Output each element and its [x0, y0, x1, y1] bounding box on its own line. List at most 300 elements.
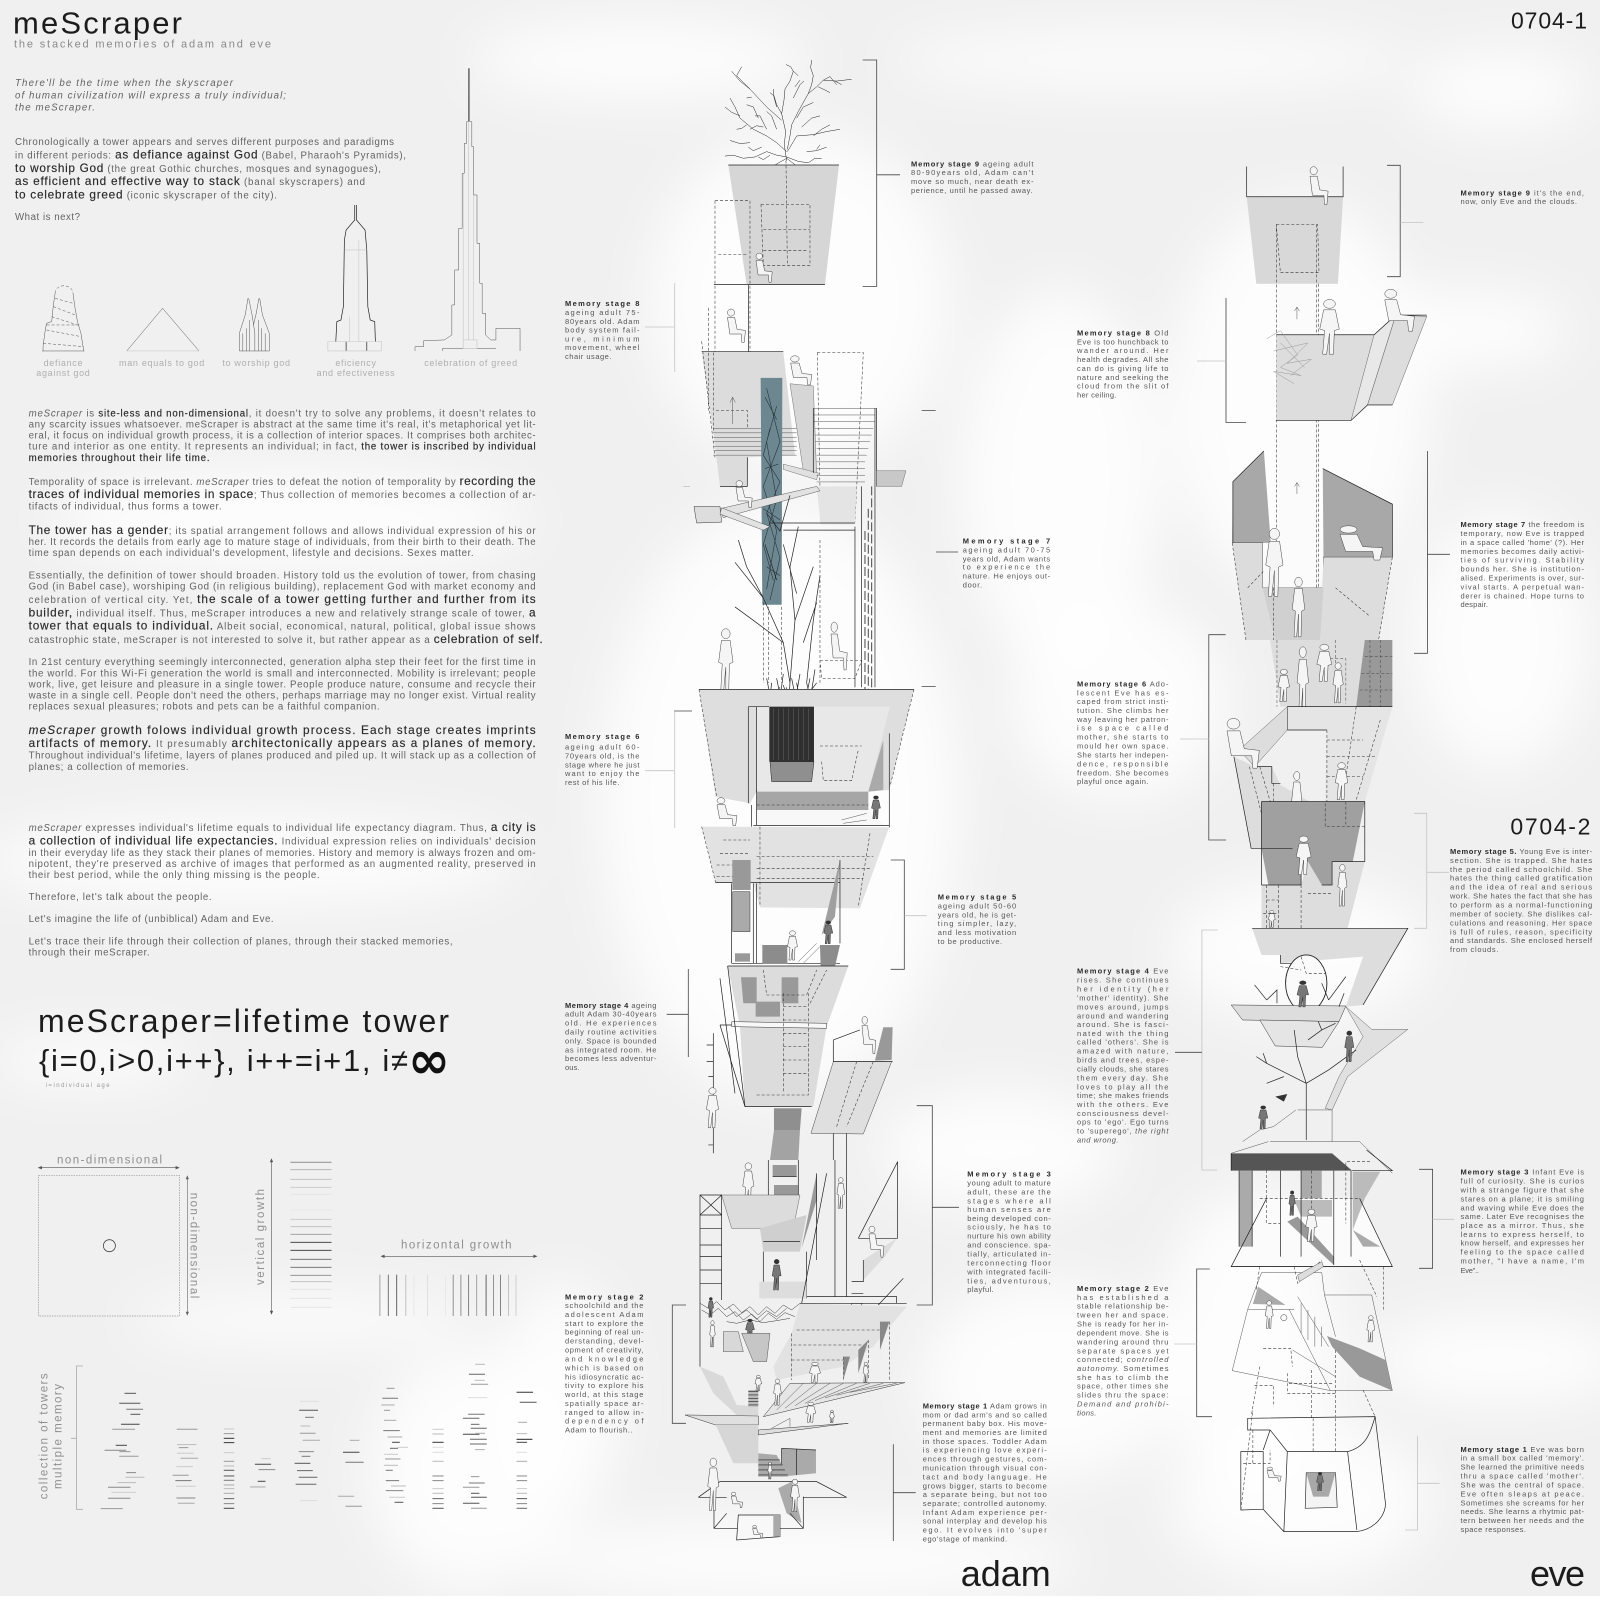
- text: adam memory stage 3: human senses are: [967, 1205, 1051, 1214]
- text: eve memory stage 6: caped from strict insti-: [1077, 697, 1169, 706]
- stage 3 floor: [773, 1303, 907, 1380]
- text block: chronology of towers: in different periods: as defiance against God (Babel, Pharaoh's Pyramids),: [15, 148, 406, 162]
- text block: manifesto: planes; a collection of memories.: [29, 762, 189, 773]
- text block: manifesto: eral, it focus on individual growth process, it is a collection of interior spaces. It comprises both architec-: [29, 430, 536, 442]
- text: eve memory stage 6: [1076, 679, 1169, 786]
- left lower plane: [700, 1367, 758, 1415]
- text: adam memory stage 3: terconnecting floor: [967, 1258, 1051, 1267]
- text: eve memory stage 1: space responses.: [1460, 1525, 1526, 1534]
- text: eve memory stage 6: mother, she starts to: [1077, 733, 1169, 742]
- text: eve memory stage 5: member of society. She dislikes cal-: [1450, 909, 1593, 918]
- text: adam memory stage 1: a separate being, but not too: [923, 1490, 1047, 1499]
- hatched slab: [763, 1383, 905, 1417]
- text block: manifesto: Therefore, let's talk about the people.: [29, 892, 212, 903]
- stage 7 walls: [1232, 451, 1271, 543]
- stage 5 plane: [702, 827, 889, 908]
- text: eve memory stage 5: the period called schoolchild. She: [1450, 865, 1593, 874]
- text: adam memory stage 5: ageing adult 50-60: [938, 901, 1017, 910]
- text: eve memory stage 3: feeling to the space called: [1460, 1248, 1584, 1257]
- text: eve memory stage 3: [1460, 1168, 1584, 1275]
- text: eve memory stage 8: Memory stage 8 Old: [1077, 329, 1169, 338]
- text: eve memory stage 3: Eve"..: [1460, 1266, 1480, 1275]
- subtitle: the stacked memories of adam and eve: [14, 39, 271, 51]
- text: adam memory stage 3: playful.: [967, 1285, 994, 1294]
- text block: manifesto: replaces sexual pleasures; robots and pets can be a faithful companion.: [29, 702, 380, 712]
- bars: memory columns: [101, 1364, 537, 1509]
- text: adam memory stage 5: and less motivation: [938, 928, 1017, 937]
- text: adam memory stage 2: opment of creativity,: [565, 1346, 644, 1355]
- text block: chronology of towers: [15, 137, 406, 223]
- text: adam memory stage 6: 70years old, is the: [565, 751, 640, 760]
- diagram: collection of towers: multiple memory: [52, 1384, 64, 1489]
- text: adam memory stage 5: [938, 892, 1017, 946]
- diagram: collection of towers: [38, 1364, 537, 1509]
- text: eve memory stage 8: wander around. Her: [1076, 346, 1169, 355]
- text: eve memory stage 4: cially clouds, she stares: [1077, 1064, 1169, 1073]
- text block: manifesto: In 21st century everything seemingly interconnected, generation alpha step their feet for the first time in: [29, 657, 536, 668]
- text block: manifesto: memories throughout their life time.: [29, 453, 210, 464]
- formula: lifetime tower: [38, 1003, 450, 1091]
- text: eve memory stage 4: around and wandering: [1077, 1011, 1169, 1020]
- text: adam memory stage 3: Memory stage 3: [967, 1170, 1051, 1179]
- text: eve memory stage 1: She was the central of space.: [1460, 1480, 1584, 1489]
- text: adam memory stage 2: beginning of real un-: [565, 1328, 644, 1337]
- text: adam memory stage 9: perience, until he passed away.: [911, 186, 1033, 195]
- text: adam memory stage 4: ous.: [565, 1063, 580, 1072]
- text: adam memory stage 4: only. Space is bounded: [565, 1036, 657, 1045]
- lower tree: [735, 495, 820, 683]
- text: eve memory stage 8: nature and seeking the: [1077, 373, 1169, 382]
- text block: manifesto: Let's imagine the life of (unbiblical) Adam and Eve.: [29, 914, 274, 925]
- captions: tower types: against god: [36, 368, 91, 378]
- text: eve memory stage 7: Memory stage 7 the freedom is: [1460, 520, 1584, 529]
- text block: manifesto: celebration of vertical city. Yet, the scale of a tower getting further and further from its: [29, 592, 536, 606]
- text block: chronology of towers: to worship God (the great Gothic churches, mosques and synagogues),: [15, 161, 381, 175]
- icon: cathedral: [239, 298, 269, 351]
- text: adam memory stage 4: adult Adam 30-40years: [565, 1010, 657, 1019]
- diagram: horizontal growth: horizontal growth: [401, 1239, 512, 1251]
- text: adam memory stage 8: [565, 299, 640, 361]
- text: eve memory stage 5: is full of rules, reason, specificity: [1450, 927, 1593, 936]
- text: adam memory stage 1: Memory stage 1 Adam grows in: [923, 1401, 1047, 1410]
- text: eve memory stage 1: in a small box called 'memory'.: [1460, 1454, 1584, 1463]
- text: eve memory stage 6: lescent Eve has es-: [1077, 688, 1169, 697]
- text: eve memory stage 1: Memory stage 1 Eve was born: [1460, 1445, 1584, 1454]
- stages 6 and 5 middle tower: [699, 689, 914, 967]
- text: eve memory stage 7: despair.: [1460, 600, 1488, 609]
- text: eve memory stage 2: tween her and space.: [1077, 1311, 1169, 1320]
- text: eve memory stage 3: Memory stage 3 Infant Eve is: [1460, 1168, 1584, 1177]
- text block: manifesto: meScraper expresses individual's lifetime equals to individual life expectancy diagram. Thus, a city is: [29, 820, 536, 834]
- diagram: vertical growth: vertical growth: [255, 1189, 267, 1285]
- text: adam memory stage 6: [564, 732, 640, 787]
- text: adam memory stage 9: [911, 159, 1034, 195]
- captions: tower types: celebration of greed: [424, 358, 518, 368]
- diagram: collection of towers: collection of towers: [38, 1373, 50, 1499]
- text block: manifesto: her. It records the details from early age to mature stage of individuals, from their birth to their death. The: [29, 537, 536, 548]
- formula note: i=individual age: [46, 1083, 110, 1089]
- text: eve memory stage 4: 'mother' identity). She: [1077, 993, 1169, 1002]
- text: eve memory stage 8: her ceiling.: [1077, 391, 1117, 400]
- text block: intro quote: [15, 78, 286, 114]
- text: eve memory stage 5: Memory stage 5. Young Eve is inter-: [1450, 847, 1593, 856]
- text: eve memory stage 7: in a space called 'home' (?). Her: [1460, 538, 1584, 547]
- text: adam memory stage 6: rest of his life.: [565, 778, 620, 787]
- text: adam memory stage 3: tially, articulated in-: [967, 1250, 1051, 1259]
- brackets: adam stages: [645, 60, 959, 1541]
- text block: manifesto: in their everyday life as they stack their planes of memories. History and memory is always frozen and om-: [29, 848, 536, 859]
- text: adam memory stage 7: to experience the: [963, 563, 1051, 572]
- captions: tower types: eficiency: [335, 358, 377, 368]
- balcony with figure: [875, 1027, 893, 1061]
- text: eve memory stage 3: place as a mirror. Thus, she: [1460, 1221, 1584, 1230]
- icon: empire state building: [328, 205, 382, 351]
- text: eve memory stage 4: time; she makes friends: [1077, 1091, 1169, 1100]
- text: eve memory stage 8: health degrades. All she: [1077, 355, 1169, 364]
- text: adam memory stage 7: ageing adult 70-75: [963, 545, 1051, 554]
- text: adam memory stage 2: start to explore the: [565, 1319, 644, 1328]
- text block: manifesto: tifacts of individual, thus forms a tower.: [29, 502, 222, 512]
- diagram: non-dimensional square: non-dimensional: [188, 1193, 200, 1298]
- text: eve memory stage 2: has established a: [1077, 1293, 1169, 1302]
- stages 3 to 1 lower tower: [685, 1160, 907, 1540]
- text: eve memory stage 6: dence, responsible: [1077, 759, 1169, 768]
- text block: manifesto: catastrophic state, meScraper is not interested to solve it, but rather appear as a celebration of self.: [29, 632, 543, 646]
- text block: manifesto: their best period, while the only thing missing is the people.: [29, 870, 320, 881]
- text: adam memory stage 2: adolescent Adam: [565, 1310, 644, 1319]
- text: eve memory stage 2: wandering around thru: [1076, 1337, 1169, 1346]
- grass: [767, 669, 817, 712]
- text: adam memory stage 6: stage where he just: [565, 760, 640, 769]
- text: adam memory stage 1: is experiencing love experi-: [923, 1446, 1047, 1455]
- text: adam memory stage 3: sciously, he has to: [967, 1223, 1051, 1232]
- text: eve memory stage 5: culations and reasoning. Her space: [1450, 918, 1593, 927]
- text: eve memory stage 4: amazed with nature,: [1077, 1047, 1169, 1056]
- text: adam memory stage 8: movement, wheel: [565, 343, 640, 352]
- text: eve memory stage 8: can do is giving life to: [1077, 364, 1169, 373]
- text block: manifesto: traces of individual memories in space; Thus collection of memories becomes a collection of ar-: [29, 487, 536, 501]
- diagram: horizontal growth: [380, 1239, 537, 1316]
- stage 8 planes: [1276, 335, 1374, 420]
- text: adam memory stage 3: stages where all: [967, 1196, 1051, 1205]
- text: adam memory stage 1: Infant Adam experience per-: [923, 1508, 1047, 1517]
- text: eve memory stage 2: separate spaces yet: [1077, 1346, 1169, 1355]
- text: adam memory stage 2: Adam to flourish..: [565, 1426, 633, 1435]
- text: adam memory stage 7: [963, 537, 1051, 590]
- text: eve memory stage 4: to 'superego', the right: [1077, 1127, 1169, 1136]
- text: eve memory stage 7: derer is chained. Hope turns to: [1460, 592, 1584, 601]
- text: eve memory stage 4: her identity (her: [1077, 984, 1169, 993]
- text: eve memory stage 5: work. She hates the fact that she has: [1449, 892, 1593, 901]
- text: adam memory stage 1: ences through gestures, com-: [923, 1455, 1047, 1464]
- text: eve memory stage 5: hates the thing called gratification: [1450, 874, 1593, 883]
- text block: intro quote: the meScraper.: [15, 102, 95, 114]
- tall dark verticals: [855, 408, 875, 687]
- text: adam memory stage 8: ageing adult 75-: [565, 308, 640, 317]
- text: adam memory stage 3: [966, 1170, 1051, 1294]
- text: adam memory stage 6: ageing adult 60-: [565, 742, 640, 751]
- text: adam memory stage 2: tivity to explore his: [565, 1381, 644, 1390]
- text: eve memory stage 5: [1449, 847, 1593, 954]
- text: eve memory stage 7: ties of surviving. Stability: [1460, 556, 1584, 565]
- text: eve memory stage 5: section. She is trapped. She hates: [1450, 856, 1593, 865]
- text block: manifesto: Essentially, the definition of tower should broaden. History told us the evolution of tower, from chasing: [29, 570, 536, 582]
- tree on pot: [725, 60, 852, 176]
- text: eve memory stage 4: with the others. Eve: [1076, 1100, 1169, 1109]
- text: eve memory stage 6: way leaving her patron-: [1076, 715, 1169, 724]
- text: eve memory stage 4: around. She is fasci-: [1077, 1020, 1169, 1029]
- text: adam memory stage 2: and knowledge: [565, 1354, 644, 1363]
- text: eve memory stage 2: stable relationship be-: [1077, 1302, 1169, 1311]
- text: eve memory stage 4: and wrong.: [1077, 1136, 1119, 1145]
- text: adam memory stage 2: spatially space ar-: [565, 1399, 644, 1408]
- text: adam memory stage 3: young adult to mature: [967, 1178, 1051, 1187]
- text block: manifesto: The tower has a gender; its spatial arrangement follows and allows individual expression of his or: [29, 523, 536, 537]
- text: eve memory stage 4: consciousness devel-: [1077, 1109, 1169, 1118]
- text: adam memory stage 3: nurture his own ability: [967, 1232, 1051, 1241]
- text block: chronology of towers: Chronologically a tower appears and serves different purposes and paradigms: [15, 137, 394, 148]
- text: adam memory stage 2: Memory stage 2: [565, 1292, 644, 1301]
- brackets: eve stages: [1174, 165, 1454, 1530]
- text: eve memory stage 2: dependent move. She is: [1077, 1328, 1169, 1337]
- text block: manifesto: time span depends on each individual's development, lifestyle and decisions. Sexes matter.: [29, 548, 474, 559]
- text: eve memory stage 2: slides thru the space:: [1077, 1391, 1169, 1400]
- text: eve memory stage 2: autonomy. Sometimes: [1077, 1364, 1169, 1373]
- text: eve memory stage 2: tions.: [1077, 1408, 1097, 1417]
- text: adam memory stage 8: 80years old. Adam: [565, 317, 640, 326]
- text: eve memory stage 3: learns to express herself, to: [1460, 1230, 1584, 1239]
- text: eve memory stage 4: nated with the thing: [1077, 1029, 1169, 1038]
- text: adam memory stage 2: schoolchild and the: [565, 1301, 644, 1310]
- text: adam memory stage 7: Memory stage 7: [963, 537, 1051, 546]
- text: eve memory stage 6: She starts her indepen-: [1077, 750, 1169, 759]
- stages 3 to 1 lower tower: [1231, 1150, 1392, 1532]
- text: adam memory stage 7: nature. He enjoys out-: [963, 572, 1051, 581]
- stages 9 to 7 upper tower: [1232, 167, 1427, 640]
- label: 0704-1: 0704-1: [1511, 8, 1587, 34]
- text: adam memory stage 3: ties, adventurous,: [967, 1276, 1051, 1285]
- text block: manifesto: meScraper growth folows individual growth process. Each stage creates imprints: [29, 723, 536, 737]
- captions: tower types: defiance: [44, 358, 83, 368]
- stage 3 rooms: [773, 1165, 797, 1177]
- text: adam memory stage 4: old. He experiences: [565, 1019, 657, 1028]
- formula: lifetime tower: meScraper=lifetime tower: [38, 1003, 449, 1039]
- text: eve memory stage 3: full of curiosity. She is curios: [1460, 1177, 1584, 1186]
- text block: manifesto: builder, individual itself. Thus, meScraper introduces a new and relatively strange scale of tower, a: [29, 606, 536, 620]
- text: adam memory stage 1: munication through visual con-: [923, 1464, 1047, 1473]
- panel: adam tower: [683, 60, 914, 1540]
- text: adam memory stage 2: ranged to allow in-: [565, 1408, 644, 1417]
- text: adam memory stage 1: separate; controlled autonomy.: [923, 1499, 1047, 1508]
- diagram: non-dimensional square: non-dimensional: [57, 1154, 162, 1166]
- text: adam memory stage 1: ego. It evolves into 'super: [923, 1526, 1047, 1535]
- text: eve memory stage 1: tern between her needs and the: [1460, 1516, 1584, 1525]
- text: eve memory stage 5: from clouds.: [1450, 945, 1499, 954]
- icon: tower of babel: [42, 286, 84, 351]
- ledge: [1287, 707, 1392, 802]
- text: eve memory stage 5: and the idea of real and serious: [1450, 883, 1593, 892]
- text block: manifesto: the world. For this Wi-Fi generation the world is small and interconnected. Mobility is irrelevant; people: [29, 668, 536, 680]
- text: eve memory stage 5: to perform as a normal-functioning: [1450, 900, 1593, 909]
- text: eve memory stage 1: thru a space called 'mother'.: [1460, 1472, 1584, 1481]
- text block: manifesto: a collection of individual life expectancies. Individual expression relies on individuals' decision: [29, 834, 536, 848]
- text: adam memory stage 2: world, at this stage: [564, 1390, 644, 1399]
- text: eve memory stage 1: She learned the primitive needs: [1460, 1463, 1584, 1472]
- text: adam memory stage 1: ego'stage of mankind.: [923, 1535, 1008, 1544]
- text: adam memory stage 9: move so much, near death ex-: [911, 177, 1034, 186]
- title: [13, 6, 271, 51]
- text: adam memory stage 4: becomes less adventur-: [565, 1054, 657, 1063]
- text: eve memory stage 3: and waving while Eve does the: [1460, 1203, 1584, 1212]
- text: eve memory stage 1: needs. She learns a rhytmic pat-: [1460, 1507, 1584, 1516]
- text block: manifesto: artifacts of memory. It presumably architectonically appears as a planes of memory.: [29, 736, 536, 750]
- text: eve memory stage 2: space, other times she: [1077, 1382, 1169, 1391]
- text block: manifesto: [28, 408, 543, 959]
- tree: [1255, 977, 1356, 1140]
- captions: tower types: man equals to god: [119, 358, 205, 368]
- text: adam memory stage 3: adult, these are the: [967, 1187, 1051, 1196]
- shaft: [1276, 284, 1320, 640]
- text: adam memory stage 1: tact and body language. He: [923, 1472, 1047, 1481]
- text block: manifesto: ture and interior as one entity. It represents an individual; in fact, the tower is inscribed by individual: [29, 442, 536, 452]
- text: adam memory stage 1: [923, 1401, 1047, 1544]
- stage 6 plane: [699, 689, 914, 803]
- text block: intro quote: of human civilization will express a truly individual;: [15, 90, 286, 102]
- text block: manifesto: work, live, get leisure and pleasure in a single tower. People produce nature, consume and recycle their: [28, 680, 536, 690]
- text: adam memory stage 2: which is based on: [564, 1363, 644, 1372]
- text block: chronology of towers: What is next?: [15, 212, 81, 223]
- text: eve memory stage 4: [1076, 967, 1169, 1145]
- text block: manifesto: meScraper is site-less and non-dimensional, it doesn't try to solve any problems, it doesn't relates to: [29, 408, 536, 420]
- text: adam memory stage 3: with integrated facili-: [966, 1267, 1051, 1276]
- text: eve memory stage 3: stares on a plane; it is smiling: [1460, 1194, 1584, 1203]
- text: adam memory stage 4: as integrated room. He: [565, 1045, 657, 1054]
- text: eve memory stage 3: know herself, and expresses her: [1460, 1239, 1584, 1248]
- captions: tower types: to worship god: [222, 358, 291, 368]
- stage 8 plane: [702, 352, 795, 486]
- text: eve memory stage 4: moves around, jumps: [1077, 1002, 1169, 1011]
- text: eve memory stage 5: and standards. She enclosed herself: [1450, 936, 1593, 945]
- text: adam memory stage 1: in those spaces. Toddler Adam: [923, 1437, 1047, 1446]
- text: adam memory stage 2: [564, 1292, 644, 1435]
- text block: chronology of towers: to celebrate greed (iconic skyscraper of the city).: [15, 188, 277, 202]
- text: adam memory stage 1: permanent baby box. His move-: [923, 1419, 1047, 1428]
- text: eve memory stage 2: [1076, 1284, 1169, 1417]
- text: adam memory stage 6: want to enjoy the: [564, 769, 640, 778]
- text: adam memory stage 1: grows bigger, starts to become: [923, 1481, 1047, 1490]
- teal column: [761, 378, 782, 605]
- text: eve memory stage 1: Sometimes she screams for her: [1460, 1498, 1584, 1507]
- text: eve memory stage 6: playful once again.: [1077, 777, 1149, 786]
- text: adam memory stage 9: Memory stage 9 ageing adult: [911, 159, 1034, 168]
- text: adam memory stage 2: derstanding, devel-: [565, 1337, 644, 1346]
- icon: burj khalifa: [415, 68, 520, 351]
- text: adam memory stage 1: sonal interplay and develop his: [923, 1517, 1047, 1526]
- text: adam memory stage 9: 80-90years old, Adam can't: [911, 168, 1034, 177]
- dark stage 5 plane: [1261, 802, 1365, 885]
- label: adam: adam: [961, 1553, 1051, 1594]
- text: eve memory stage 6: ise space called: [1077, 724, 1169, 733]
- text: eve memory stage 9: Memory stage 9 it's the end,: [1460, 188, 1584, 197]
- text block: manifesto: nipotent, they're preserved as archive of images that performed as an augmented reality, preserved in: [29, 859, 536, 870]
- text: eve memory stage 2: she has to climb the: [1077, 1373, 1169, 1382]
- text: adam memory stage 5: Memory stage 5: [938, 892, 1017, 901]
- text: eve memory stage 3: same. Later Eve recognises the: [1460, 1212, 1584, 1221]
- text: eve memory stage 4: birds and trees, espe-: [1077, 1056, 1169, 1065]
- text block: manifesto: Temporality of space is irrelevant. meScraper tries to defeat the notion of temporality by recording the: [29, 474, 536, 488]
- text: eve memory stage 7: vival starts. A perpetual wan-: [1460, 583, 1584, 592]
- text block: manifesto: Let's trace their life through their collection of planes, through their stacked memories,: [29, 936, 453, 948]
- title: meScraper: [13, 6, 182, 40]
- text: eve memory stage 7: bounds her. She is institution-: [1460, 565, 1584, 574]
- rubble band: [700, 1302, 800, 1323]
- text: eve memory stage 2: Demand and prohibi-: [1077, 1399, 1169, 1408]
- stage 1 outlines: [1241, 1417, 1385, 1532]
- text: eve memory stage 7: alised. Experiments is over, sur-: [1460, 574, 1584, 583]
- stages 6 to 4 middle tower: [1227, 640, 1408, 1173]
- text: eve memory stage 7: [1460, 520, 1584, 609]
- text: adam memory stage 1: ment and memories are limited: [923, 1428, 1047, 1437]
- text: eve memory stage 9: [1460, 188, 1584, 206]
- chart: tower evolution silhouettes: [36, 68, 520, 378]
- text: adam memory stage 7: years old, Adam wants: [963, 554, 1051, 563]
- text: eve memory stage 4: Memory stage 4 Eve: [1077, 967, 1169, 976]
- text: eve memory stage 3: with a strange figure that she: [1460, 1185, 1584, 1194]
- text: eve memory stage 8: [1076, 329, 1169, 400]
- diagram: non-dimensional square: [39, 1154, 199, 1316]
- text: eve memory stage 4: ops to 'ego'. Ego turns: [1077, 1118, 1169, 1127]
- text: eve memory stage 1: Eve often sleaps at peace.: [1460, 1489, 1584, 1498]
- text: eve memory stage 9: now, only Eve and the clouds.: [1460, 197, 1578, 206]
- text: eve memory stage 2: Memory stage 2 Eve: [1077, 1284, 1169, 1293]
- text: eve memory stage 8: Eve is too hunchback to: [1077, 338, 1169, 347]
- text block: manifesto: Throughout individual's lifetime, layers of planes produced and piled up. It will stack up as a collection of: [29, 750, 536, 762]
- text block: manifesto: tower that equals to individual. Albeit social, economical, natural, political, global issue shows: [29, 618, 536, 632]
- text: adam memory stage 5: ting simpler, lazy,: [938, 919, 1017, 928]
- text block: manifesto: through their meScraper.: [29, 948, 150, 959]
- formula: lifetime tower: {i=0,i>0,i++}, i++=i+1, i≠: [39, 1043, 408, 1078]
- text: eve memory stage 6: tution. She climbs her: [1077, 706, 1169, 715]
- stage 9 and 8 upper tower: [683, 60, 906, 712]
- text: adam memory stage 4: daily routine activities: [565, 1028, 657, 1037]
- text: eve memory stage 2: connected; controlled: [1077, 1355, 1169, 1364]
- text: adam memory stage 1: mom or dad arm's and so called: [923, 1410, 1047, 1419]
- text: eve memory stage 6: freedom. She becomes: [1077, 768, 1169, 777]
- text: eve memory stage 7: temporary, now Eve is trapped: [1460, 529, 1584, 538]
- text: adam memory stage 8: body system fail-: [565, 325, 640, 334]
- text: adam memory stage 4: Memory stage 4 ageing: [565, 1001, 657, 1010]
- text: eve memory stage 4: rises. She continues: [1077, 976, 1169, 985]
- text: adam memory stage 6: Memory stage 6: [565, 732, 640, 741]
- text: adam memory stage 8: Memory stage 8: [565, 299, 640, 308]
- text: eve memory stage 4: called 'others'. She is: [1077, 1038, 1169, 1047]
- captions: tower types: [36, 358, 518, 378]
- text: eve memory stage 3: mother, "I have a name, I'm: [1460, 1256, 1584, 1265]
- text block: manifesto: waste in a single cell. People don't need the others, perhaps marriage may no longer exist. Virtual reality: [28, 690, 536, 702]
- text: eve memory stage 2: She is ready for her in-: [1077, 1320, 1169, 1329]
- text: eve memory stage 4: loves to play all the: [1077, 1082, 1169, 1091]
- text block: manifesto: any scarcity issues whatsoever. meScraper is abstract at the same time it's real, it's metaphorical yet lit-: [29, 420, 536, 430]
- text: adam memory stage 8: ure, minimum: [565, 334, 640, 343]
- text block: chronology of towers: as efficient and effective way to stack (banal skyscrapers) and: [15, 174, 365, 188]
- text: eve memory stage 4: them every day. She: [1077, 1073, 1169, 1082]
- text: eve memory stage 1: [1460, 1445, 1584, 1534]
- stage 1 ground: [782, 1448, 816, 1477]
- icon: pyramid: [127, 308, 199, 351]
- text: adam memory stage 5: years old, he is get-: [938, 910, 1017, 919]
- text block: intro quote: There'll be the time when the skyscraper: [15, 78, 234, 89]
- text: adam memory stage 4: [565, 1001, 657, 1072]
